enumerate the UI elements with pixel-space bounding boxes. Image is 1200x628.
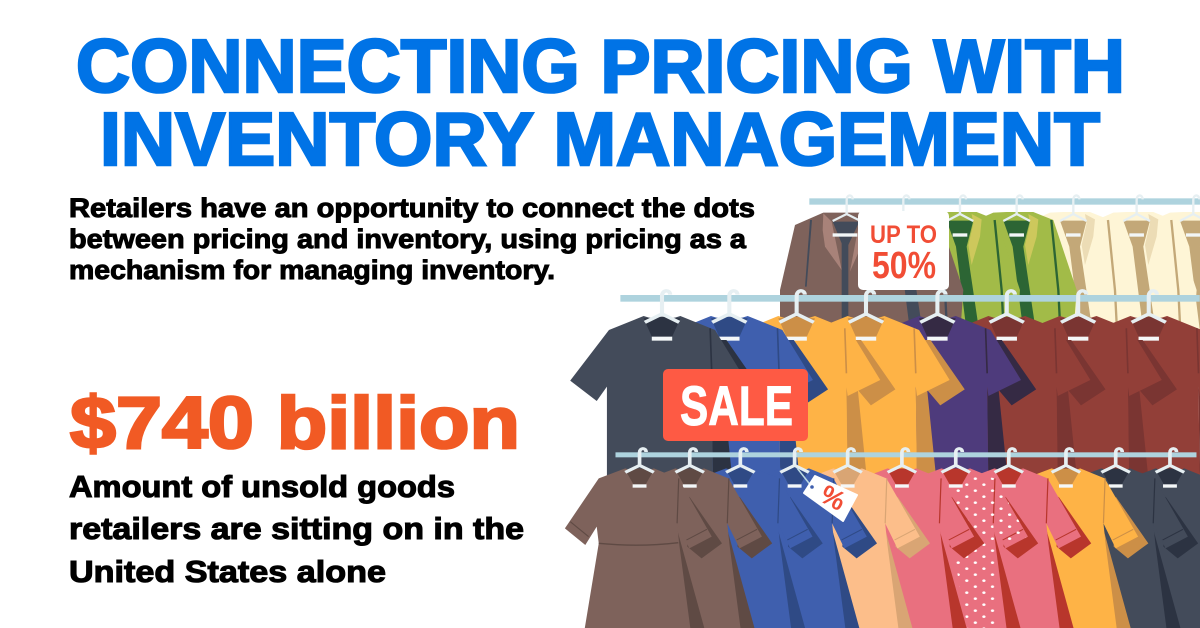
middle rack of t-shirts: [570, 291, 1200, 490]
sign: sale: [663, 369, 808, 441]
statistic description: retailers are sitting on in the: [69, 511, 524, 546]
sign: up to 50%: 50%: [872, 245, 936, 287]
title: INVENTORY MANAGEMENT: [100, 97, 1100, 181]
statistic description: [69, 469, 524, 589]
intro paragraph: mechanism for managing inventory.: [69, 255, 555, 285]
statistic description: Amount of unsold goods: [69, 469, 455, 504]
sign: sale: SALE: [680, 374, 793, 437]
price tag: [797, 468, 857, 521]
sign: up to 50%: [858, 211, 949, 290]
statistic description: United States alone: [69, 554, 386, 589]
illustration: clothing racks: [565, 195, 1200, 628]
title: [76, 24, 1125, 181]
intro paragraph: between pricing and inventory, using pricing as a: [69, 224, 747, 254]
price tag: %: [815, 479, 851, 517]
bottom rack of dresses: [565, 449, 1200, 628]
intro paragraph: Retailers have an opportunity to connect the dots: [69, 193, 755, 223]
title: CONNECTING PRICING WITH: [76, 24, 1125, 108]
intro paragraph: [69, 193, 755, 285]
sign: up to 50%: UP TO: [870, 221, 937, 249]
big statistic: $740 billion: [70, 383, 520, 464]
top rack of jackets: [780, 195, 1200, 337]
